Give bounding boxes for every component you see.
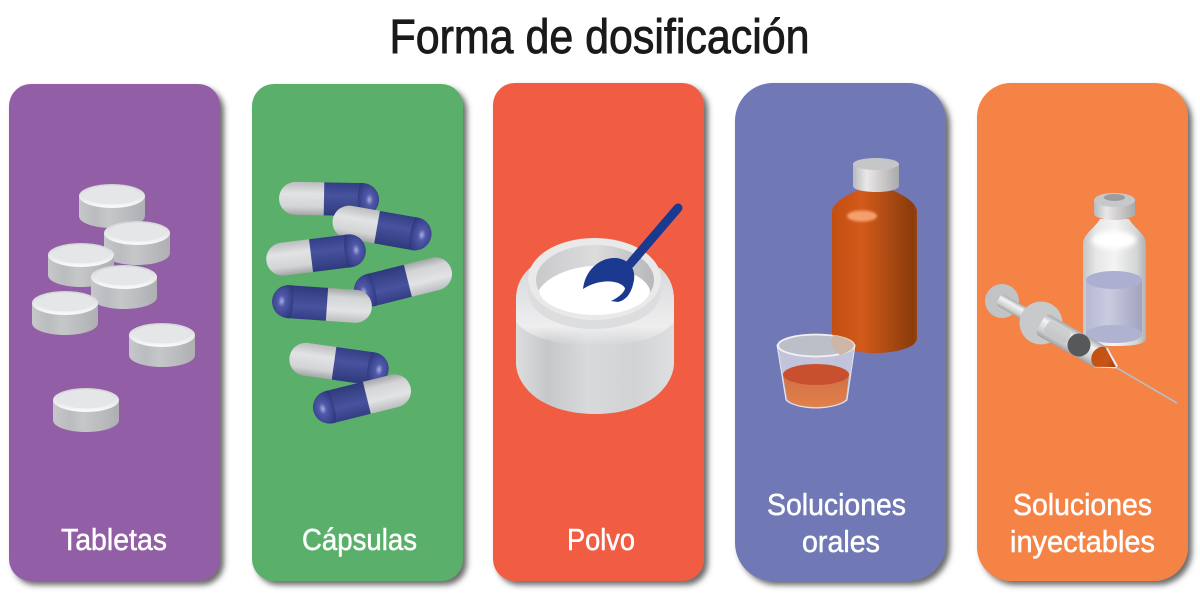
panel: Cápsulas [252, 84, 463, 581]
icon: syrup bottle [832, 158, 917, 353]
panel: Soluciones orales [735, 83, 946, 581]
icon: tablets [32, 184, 195, 432]
label: Soluciones orales: Soluciones [767, 487, 906, 522]
icon: vial [1083, 193, 1146, 346]
label: Soluciones inyectables: Soluciones [1013, 487, 1152, 522]
label: Tabletas: Tabletas [61, 522, 167, 557]
panel: Soluciones inyectables [977, 83, 1188, 581]
label: Polvo: Polvo [567, 522, 635, 557]
title: Forma de dosificación [390, 10, 810, 64]
label: Soluciones orales [767, 487, 906, 559]
label: Soluciones inyectables: inyectables [1010, 524, 1155, 559]
icon: scoop [583, 208, 678, 302]
icon: powder jar with scoop [516, 208, 678, 414]
panel: Polvo [493, 83, 704, 581]
label: Cápsulas: Cápsulas [302, 522, 417, 557]
label: Soluciones orales: orales [802, 524, 880, 559]
label: Soluciones inyectables [1010, 487, 1155, 559]
icon: dosing cup [777, 334, 855, 408]
icon: syringe [985, 284, 1177, 403]
panel: Tabletas [9, 84, 220, 581]
icon: capsules [264, 182, 456, 427]
